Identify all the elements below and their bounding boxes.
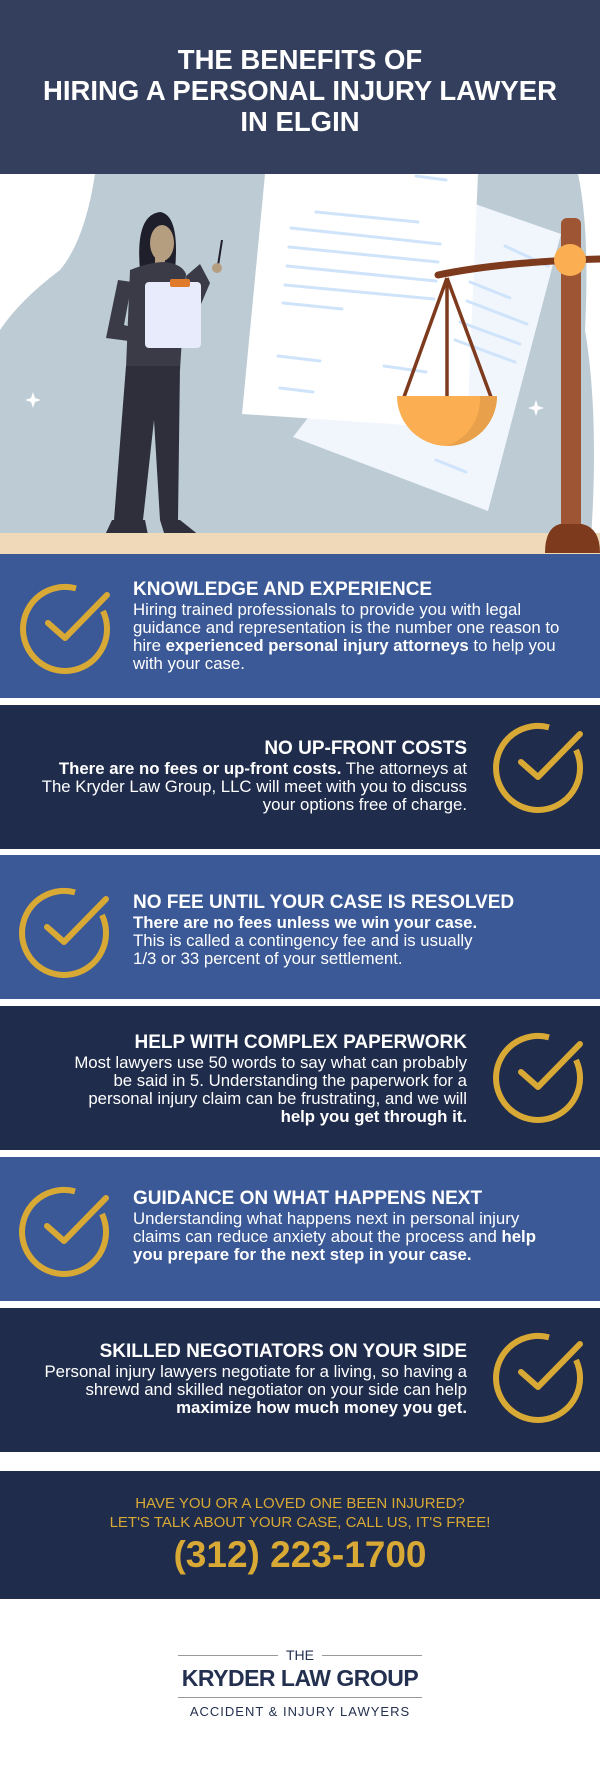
text: Personal injury lawyers negotiate for a living, so having a xyxy=(44,1362,467,1381)
cta text xyxy=(110,1495,490,1531)
icon: check xyxy=(19,888,109,978)
text: 1/3 or 33 percent of your settlement. xyxy=(133,949,403,968)
text: There are no fees or up-front costs. The attorneys at xyxy=(59,759,467,778)
cta text: LET'S TALK ABOUT YOUR CASE, CALL US, IT'S FREE! xyxy=(110,1514,490,1531)
title: HIRING A PERSONAL INJURY LAWYER xyxy=(43,75,557,106)
text: your options free of charge. xyxy=(263,795,467,814)
text: hire experienced personal injury attorneys to help you xyxy=(133,636,556,655)
text: KNOWLEDGE AND EXPERIENCE xyxy=(133,579,432,600)
logo: THE xyxy=(286,1647,314,1663)
text: personal injury claim can be frustrating, and we will xyxy=(88,1089,467,1108)
text xyxy=(133,1188,536,1264)
text: Hiring trained professionals to provide you with legal xyxy=(133,600,521,619)
icon: check xyxy=(20,584,110,674)
text: There are no fees unless we win your case. xyxy=(133,913,477,932)
text xyxy=(42,738,467,814)
panel: no fee until resolved xyxy=(0,855,600,999)
header xyxy=(0,0,600,174)
text: Most lawyers use 50 words to say what can probably xyxy=(74,1053,467,1072)
phone: (312) 223-1700 xyxy=(173,1534,427,1575)
logo: ACCIDENT & INJURY LAWYERS xyxy=(190,1704,410,1719)
panel: guidance xyxy=(0,1157,600,1301)
text: SKILLED NEGOTIATORS ON YOUR SIDE xyxy=(100,1341,467,1362)
icon: check xyxy=(493,1332,583,1423)
paper back xyxy=(293,204,561,511)
panel: complex paperwork xyxy=(0,1006,600,1150)
text: claims can reduce anxiety about the process and help xyxy=(133,1227,536,1246)
panel: knowledge and experience xyxy=(0,554,600,698)
text: with your case. xyxy=(133,654,245,673)
floor xyxy=(0,533,600,554)
text: shrewd and skilled negotiator on your side can help xyxy=(85,1380,467,1399)
text: GUIDANCE ON WHAT HAPPENS NEXT xyxy=(133,1188,482,1209)
text: help you get through it. xyxy=(281,1107,467,1126)
cta text: HAVE YOU OR A LOVED ONE BEEN INJURED? xyxy=(135,1495,465,1512)
sparkles xyxy=(25,392,544,416)
text: HELP WITH COMPLEX PAPERWORK xyxy=(134,1032,467,1053)
illustration xyxy=(0,174,600,554)
title: IN ELGIN xyxy=(240,106,360,137)
text xyxy=(133,579,559,673)
text: NO FEE UNTIL YOUR CASE IS RESOLVED xyxy=(133,892,514,913)
paper front xyxy=(242,174,548,472)
text: maximize how much money you get. xyxy=(176,1398,467,1417)
call to action xyxy=(0,1471,600,1599)
text: guidance and representation is the number one reason to xyxy=(133,618,559,637)
text: This is called a contingency fee and is usually xyxy=(133,931,473,950)
text: NO UP-FRONT COSTS xyxy=(264,738,467,759)
woman xyxy=(105,212,222,536)
scale xyxy=(397,218,600,538)
icon: check xyxy=(493,1032,583,1123)
text: be said in 5. Understanding the paperwork for a xyxy=(113,1071,467,1090)
text: you prepare for the next step in your case. xyxy=(133,1245,472,1264)
text xyxy=(133,892,514,968)
text: The Kryder Law Group, LLC will meet with you to discuss xyxy=(42,777,467,796)
title: THE BENEFITS OF xyxy=(178,44,422,75)
icon: check xyxy=(493,722,583,813)
logo xyxy=(178,1647,422,1719)
panel: negotiators xyxy=(0,1308,600,1452)
text: Understanding what happens next in personal injury xyxy=(133,1209,519,1228)
text xyxy=(44,1341,467,1417)
icon: check xyxy=(19,1186,109,1277)
logo: KRYDER LAW GROUP xyxy=(182,1665,418,1691)
title xyxy=(43,44,557,137)
panel: no up-front costs xyxy=(0,705,600,849)
text xyxy=(74,1032,467,1126)
